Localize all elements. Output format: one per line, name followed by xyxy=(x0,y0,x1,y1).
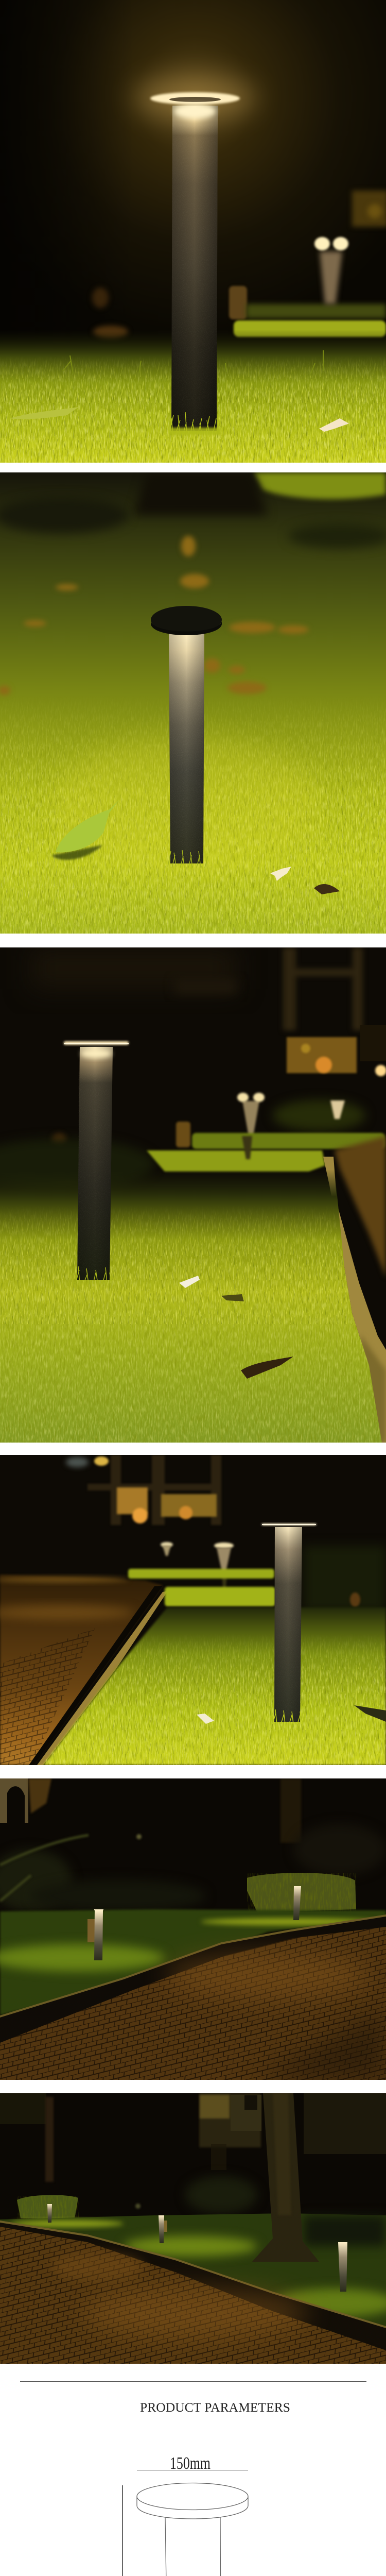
house behind trees xyxy=(0,2093,386,2213)
dimension: 600mm xyxy=(105,2485,124,2576)
lit hedge xyxy=(247,1873,356,1912)
background lamp xyxy=(314,237,348,304)
lawn xyxy=(0,1170,386,1443)
lawn xyxy=(42,1606,386,1765)
dimension: 150mm: 150mm xyxy=(170,2454,210,2473)
background blurred objects xyxy=(0,0,386,361)
brick path xyxy=(0,2227,386,2364)
brick path xyxy=(0,1927,386,2080)
lamp 3 xyxy=(338,2242,347,2292)
curb xyxy=(29,1586,168,1765)
brick path, gap and curb xyxy=(323,1136,386,1443)
lawn texture xyxy=(0,709,386,934)
lamp line drawing xyxy=(137,2483,248,2576)
photo: bollard lamp with dark cap on lawn with leaf xyxy=(0,472,386,934)
photo: two lamps along curving brick path xyxy=(0,1778,386,2080)
divider line xyxy=(20,2381,366,2382)
background lamps xyxy=(237,1093,345,1136)
lit hedge xyxy=(17,2195,79,2219)
photo: three lamps by tree and brick path xyxy=(0,2093,386,2364)
lawn xyxy=(0,330,386,463)
fallen leaf xyxy=(51,800,119,860)
photo: lit bollard lamp on lawn at night xyxy=(0,0,386,463)
section: product parameters xyxy=(122,2401,290,2576)
lit lawn strips xyxy=(147,1133,385,1172)
brick path xyxy=(0,1574,163,1765)
main lamp xyxy=(64,1041,129,1284)
lamp left xyxy=(87,1909,103,1960)
main lamp xyxy=(133,75,257,435)
lit strips xyxy=(128,1546,386,1624)
lamp right xyxy=(293,1886,301,1920)
curb xyxy=(0,1914,386,2043)
lamp 2 xyxy=(159,2215,167,2243)
flower and dark leaf xyxy=(270,867,340,894)
blurred building backdrop xyxy=(0,947,386,1190)
photo: lamp row along lawn edge xyxy=(0,947,386,1443)
heading: PRODUCT PARAMETERS xyxy=(140,2401,290,2415)
dark trees and building corner xyxy=(0,1778,386,1912)
background lamps xyxy=(161,1542,234,1593)
blurred house windows xyxy=(66,1455,221,1525)
lawn xyxy=(0,1909,386,2015)
lawn xyxy=(0,2213,386,2326)
photo: lamp beside brick path xyxy=(0,1455,386,1765)
tree trunk xyxy=(252,2093,319,2262)
lamp 1 xyxy=(47,2204,52,2223)
main lamp xyxy=(262,1523,316,1724)
blurred backdrop xyxy=(0,472,386,695)
curb xyxy=(0,2221,386,2350)
main lamp xyxy=(151,606,222,868)
